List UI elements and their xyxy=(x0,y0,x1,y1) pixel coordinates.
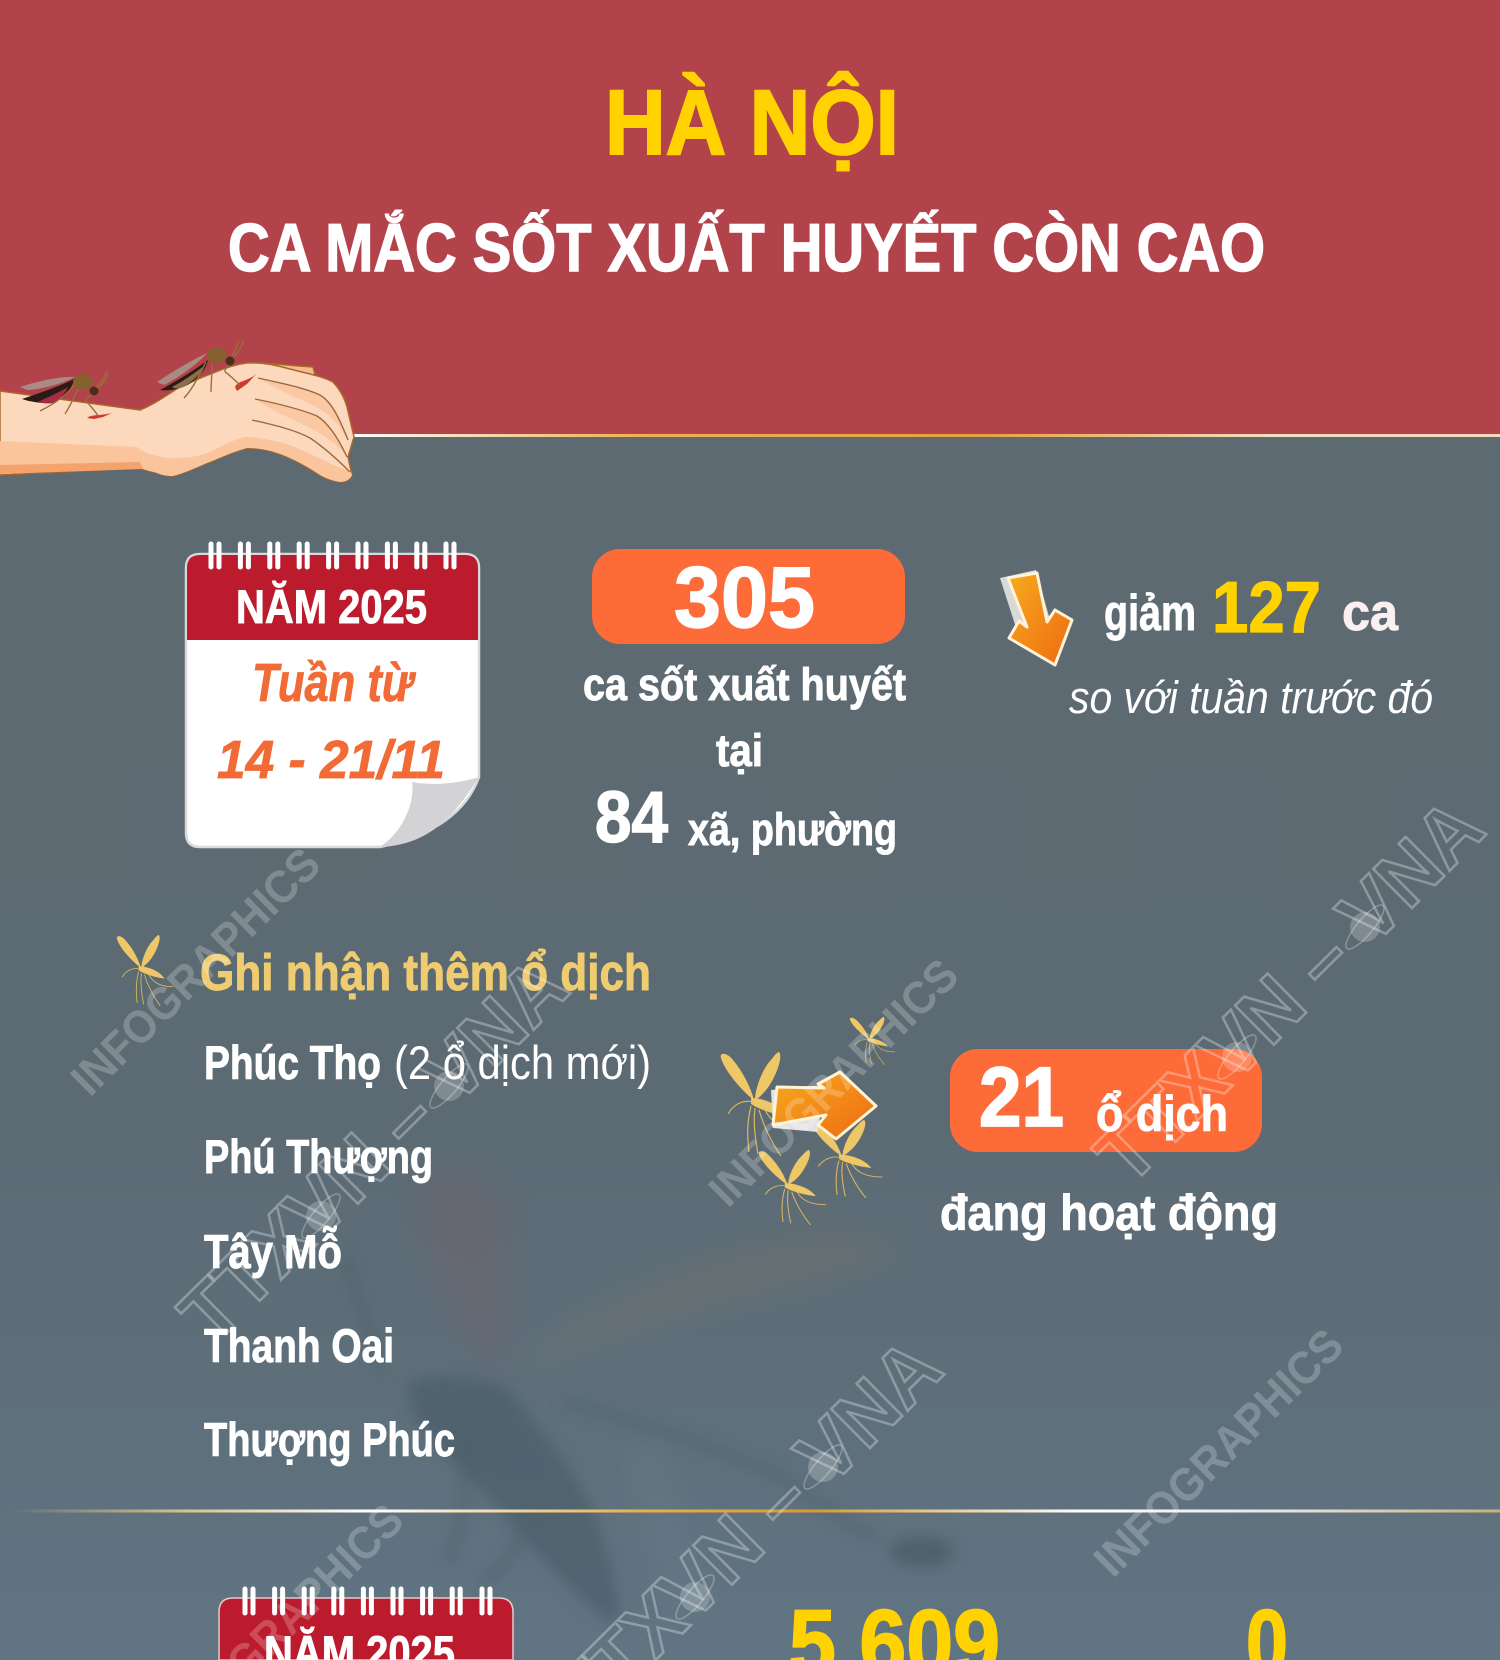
icon: down arrow xyxy=(1000,570,1072,665)
item: Phúc Thọ: Phúc Thọ xyxy=(204,1036,381,1089)
number 127: 127 xyxy=(1212,568,1321,648)
calendar rings xyxy=(211,544,454,567)
calendar red body xyxy=(219,1598,513,1660)
watermark: TTXVN - VNA 2: TTXVN – VNA xyxy=(162,941,584,1359)
word ca: ca xyxy=(1342,584,1399,642)
calendar rings xyxy=(245,1589,490,1613)
calendar: year to date xyxy=(219,1589,513,1660)
calendar dates: 14 - 21/11 xyxy=(217,730,445,790)
watermark: INFOGRAPHICS 2: INFOGRAPHICS xyxy=(698,948,968,1216)
watermark: INFOGRAPHICS 3: INFOGRAPHICS xyxy=(1083,1318,1353,1586)
caption second line: tại xyxy=(716,725,763,776)
icon: yellow mosquito xyxy=(117,935,173,1006)
header divider xyxy=(350,434,1500,437)
comparison note: so với tuần trước đó xyxy=(1069,672,1433,723)
watermark: TTXVN - VNA 1: TTXVN – VNA xyxy=(1078,782,1500,1200)
header band xyxy=(0,0,1500,436)
watermark: INFOGRAPHICS 1: INFOGRAPHICS xyxy=(60,837,330,1105)
icon: right arrow xyxy=(771,1072,876,1139)
item: Thanh Oai: Thanh Oai xyxy=(204,1319,394,1372)
calendar folded corner xyxy=(380,777,479,847)
communes label: xã, phường xyxy=(688,804,897,855)
number 21: 21 xyxy=(979,1050,1064,1144)
orange pill xyxy=(950,1049,1262,1152)
watermarks xyxy=(60,782,1500,1660)
caption: ca sốt xuất huyết xyxy=(583,659,906,710)
list heading: Ghi nhận thêm ổ dịch xyxy=(200,944,651,1001)
item: Phúc Thọ: (2 ổ dịch mới) xyxy=(394,1036,651,1089)
calendar: week xyxy=(186,544,479,847)
number 305: 305 xyxy=(674,550,815,646)
item: Phúc Thọ xyxy=(204,1036,651,1089)
icon: mosquito 2 xyxy=(157,340,244,398)
outbreak label: ổ dịch xyxy=(1096,1086,1228,1142)
title line 2: CA MẮC SỐT XUẤT HUYẾT CÒN CAO xyxy=(228,209,1265,286)
stat: 21 active outbreaks xyxy=(940,1049,1278,1241)
number 84: 84 xyxy=(595,778,668,858)
icon: hand bitten by mosquitoes xyxy=(0,340,354,482)
title xyxy=(228,71,1265,286)
title line 1: HÀ NỘI xyxy=(605,71,899,174)
list: new outbreaks xyxy=(117,935,651,1466)
orange pill xyxy=(592,549,905,644)
stat: decrease 127 xyxy=(1000,568,1433,723)
calendar red header xyxy=(187,555,478,640)
divider xyxy=(10,1510,1500,1512)
calendar week label: Tuần từ xyxy=(252,653,417,713)
item: Thượng Phúc: Thượng Phúc xyxy=(204,1413,455,1466)
calendar year: NĂM 2025 xyxy=(236,580,427,633)
calendar page xyxy=(186,554,479,847)
word giảm: giảm xyxy=(1104,585,1196,641)
active caption: đang hoạt động xyxy=(940,1185,1278,1241)
stat: 305 cases xyxy=(583,549,906,858)
icon: mosquito 1 xyxy=(20,371,108,416)
item: Phú Thượng: Phú Thượng xyxy=(204,1130,433,1183)
item: Tây Mỗ: Tây Mỗ xyxy=(204,1225,342,1278)
page background xyxy=(0,436,1500,1660)
background: blurred mosquito shadow xyxy=(343,1178,954,1625)
icon: mosquito cluster with arrow xyxy=(721,1017,895,1225)
